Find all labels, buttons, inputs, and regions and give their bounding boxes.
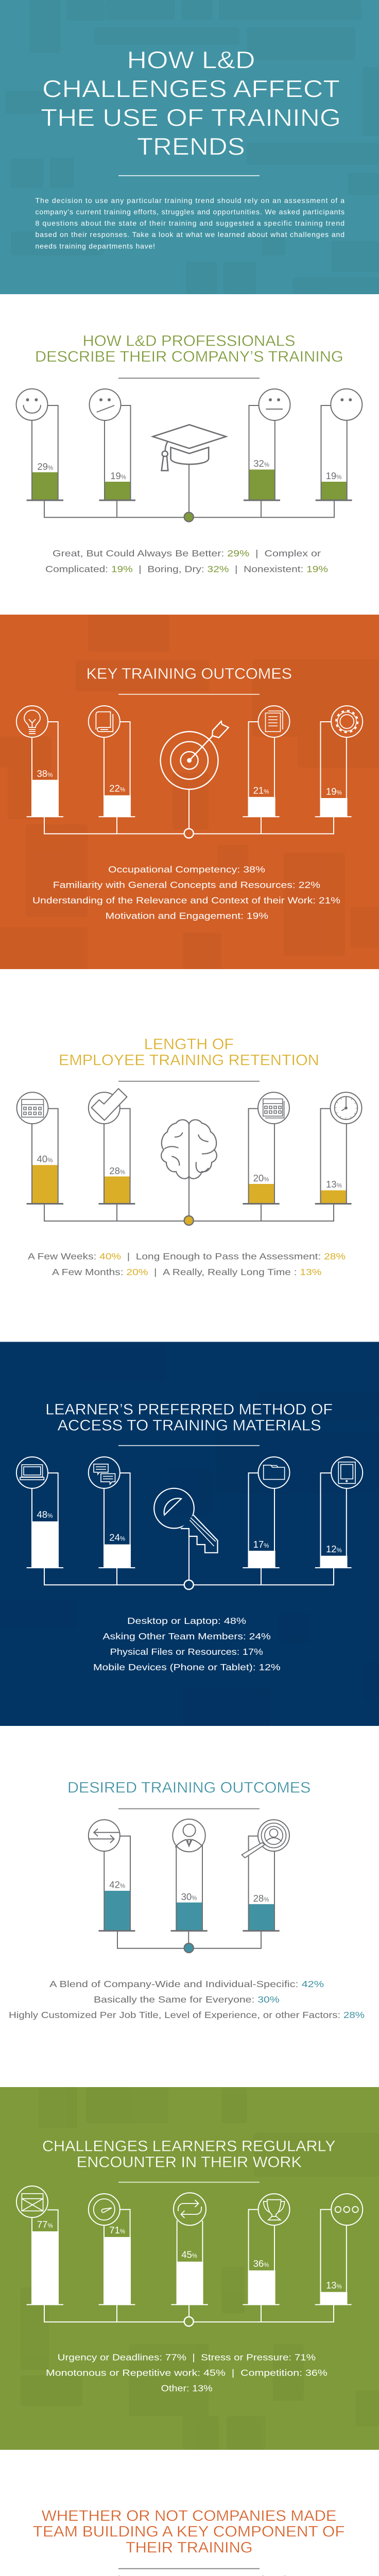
bar: desktop or laptop 48%: 48% (37, 1509, 53, 1520)
heading: HOW L&D PROFESSIONALS (82, 332, 296, 349)
icon: document (266, 711, 283, 732)
panel: desired training outcomes (0, 1726, 379, 2087)
bar: physical files 17% (243, 1457, 289, 1568)
heading: ACCESS TO TRAINING MATERIALS (58, 1417, 321, 1434)
bar: nonexistent 19% (316, 389, 362, 500)
bar: occupational competency 38% (16, 706, 63, 817)
results text: Complicated: 19% | Boring, Dry: 32% | Nonexistent: 19% (45, 564, 328, 574)
icon: gauge (94, 2199, 115, 2220)
bar: boring 32%: 32% (253, 458, 269, 469)
results text: Motivation and Engagement: 19% (106, 911, 268, 921)
intro paragraph: 8 questions about the state of their training and suggested a specific training trend (35, 219, 344, 227)
icon: book (96, 712, 113, 732)
bar: same for everyone 30% (171, 1819, 208, 1931)
bar: monotonous 45%: 45% (181, 2249, 197, 2260)
heading: THEIR TRAINING (126, 2539, 253, 2556)
results text (93, 1616, 281, 1672)
icon: calendar stack (263, 1099, 284, 1118)
icon: calendar (22, 1099, 43, 1117)
icon: check mark (92, 1089, 127, 1120)
bar: occupational competency 38%: 38% (37, 768, 53, 779)
results text (46, 2352, 328, 2394)
results text: Other: 13% (161, 2383, 213, 2394)
results text: Physical Files or Resources: 17% (110, 1647, 263, 1657)
panel: key training outcomes (0, 615, 379, 969)
icon: magnifier with person (242, 1823, 286, 1858)
bar: pass the assessment 28%: 28% (109, 1165, 125, 1176)
bar: asking team members 24%: 24% (109, 1532, 125, 1543)
bar: a few weeks 40% (16, 1092, 63, 1204)
results text: Monotonous or Repetitive work: 45% | Competition: 36% (46, 2368, 328, 2378)
bar: complex 19% (90, 389, 135, 500)
icon: tablet (338, 1462, 355, 1483)
icon: folder (264, 1465, 285, 1480)
heading: WHETHER OR NOT COMPANIES MADE (42, 2507, 337, 2524)
bar: familiarity 22%: 22% (109, 783, 125, 794)
icon: two-way arrows (88, 1829, 119, 1843)
bar: other 13%: 13% (326, 2280, 342, 2291)
bar: great 29%: 29% (37, 461, 53, 472)
icon: repeat arrows (178, 2200, 201, 2218)
bar: complex 19%: 19% (110, 470, 126, 481)
results text: A Few Months: 20% | A Really, Really Long Time : 13% (52, 1267, 321, 1277)
connector with center dot (44, 1536, 334, 1589)
icon: brain (161, 1120, 217, 1180)
icon: chat bubbles (94, 1464, 115, 1484)
bar: relevance 21% (243, 706, 289, 817)
title: TRENDS (137, 133, 245, 160)
bar: a few months 20%: 20% (253, 1173, 269, 1183)
results text: Asking Other Team Members: 24% (103, 1631, 271, 1641)
results text: Occupational Competency: 38% (108, 865, 265, 875)
icon: three dots (335, 2207, 358, 2212)
bar: nonexistent 19%: 19% (326, 470, 341, 481)
heading (33, 2507, 345, 2556)
bar: great 29% (16, 389, 63, 500)
results text (32, 865, 340, 921)
bar: a blend 42% (88, 1820, 135, 1931)
bar: really long time 13%: 13% (326, 1179, 342, 1190)
results text (28, 1251, 346, 1277)
heading (35, 332, 343, 365)
bar: boring 32% (244, 389, 290, 500)
bar: really long time 13% (315, 1092, 361, 1204)
icon: gear (336, 711, 358, 733)
icon: laptop (20, 1465, 44, 1480)
panel: team building (0, 2450, 379, 2576)
results text: A Blend of Company-Wide and Individual-Specific: 42% (49, 1979, 324, 1989)
icon: graduation cap (153, 425, 226, 470)
results text: Great, But Could Always Be Better: 29% | Complex or (53, 548, 321, 558)
bar: stress 71%: 71% (109, 2225, 125, 2235)
connector with center dot (44, 2304, 334, 2326)
title: THE USE OF TRAINING (41, 104, 341, 131)
intro paragraph: based on their responses. Take a look at what we learned about what challenges and (35, 230, 344, 239)
results text: Desktop or Laptop: 48% (127, 1616, 246, 1626)
connector with center dot (44, 1123, 334, 1225)
bar: other 13% (315, 2194, 363, 2304)
icon: person with tie (175, 1824, 202, 1848)
heading: EMPLOYEE TRAINING RETENTION (59, 1052, 319, 1069)
results text: A Few Weeks: 40% | Long Enough to Pass the Assessment: 28% (28, 1251, 346, 1261)
bar: stress 71% (89, 2194, 135, 2304)
panel: how L&D professionals describe training (0, 294, 379, 615)
bar: a few weeks 40%: 40% (37, 1154, 53, 1164)
title: HOW L&D (127, 46, 255, 73)
bar: competition 36%: 36% (253, 2258, 269, 2269)
results text: Urgency or Deadlines: 77% | Stress or Pressure: 71% (58, 2352, 316, 2363)
bar: competition 36% (243, 2194, 289, 2304)
heading: LENGTH OF (144, 1036, 234, 1053)
heading (45, 1401, 333, 1434)
bar: same for everyone 30%: 30% (181, 1891, 197, 1902)
icon: trophy (264, 2200, 285, 2220)
bar: urgency 77%: 77% (37, 2219, 53, 2230)
icon: light bulb (24, 710, 40, 734)
heading: ENCOUNTER IN THEIR WORK (77, 2154, 302, 2171)
panel: learner's preferred method of access (0, 1342, 379, 1726)
heading: LEARNER’S PREFERRED METHOD OF (45, 1401, 333, 1418)
bar: a blend 42%: 42% (109, 1879, 125, 1890)
bar: motivation 19%: 19% (326, 786, 342, 796)
results text: Familiarity with General Concepts and Resources: 22% (53, 880, 320, 890)
heading: TEAM BUILDING A KEY COMPONENT OF (33, 2523, 345, 2540)
connector with center dot (117, 1931, 261, 1953)
bar: asking team members 24% (89, 1457, 135, 1568)
heading: DESCRIBE THEIR COMPANY’S TRAINING (35, 348, 343, 365)
title (41, 46, 341, 160)
bar: highly customized 28% (242, 1820, 289, 1931)
bar: physical files 17%: 17% (253, 1539, 269, 1550)
results text: Highly Customized Per Job Title, Level of Experience, or other Factors: 28% (9, 2010, 365, 2020)
icon: clock (335, 1096, 357, 1120)
bar: a few months 20% (243, 1092, 289, 1204)
title: CHALLENGES AFFECT (42, 75, 340, 103)
heading: CHALLENGES LEARNERS REGULARLY (42, 2138, 336, 2155)
heading (42, 2138, 336, 2171)
intro paragraph: The decision to use any particular training trend should rely on an assessment of a (35, 196, 344, 205)
intro paragraph: needs training departments have! (35, 242, 155, 250)
icon: window with cross (22, 2194, 43, 2211)
bar: relevance 21%: 21% (253, 785, 269, 795)
panel: length of employee training retention (0, 969, 379, 1342)
panel: hero (0, 0, 379, 294)
results text: Mobile Devices (Phone or Tablet): 12% (93, 1662, 281, 1672)
icon: key (154, 1488, 217, 1553)
intro paragraph (35, 196, 344, 250)
results text: Basically the Same for Everyone: 30% (94, 1994, 280, 2005)
bar: mobile devices 12%: 12% (326, 1544, 342, 1554)
results text: Understanding of the Relevance and Context of their Work: 21% (32, 895, 340, 906)
heading (59, 1036, 319, 1069)
bar: pass the assessment 28% (89, 1089, 135, 1204)
bar: mobile devices 12% (315, 1457, 363, 1568)
icon: target with arrow (161, 721, 229, 789)
bar: monotonous 45% (171, 2193, 208, 2304)
bar: desktop or laptop 48% (16, 1457, 63, 1568)
connector with center dot (44, 789, 334, 838)
intro paragraph: company’s current training efforts, struggles and opportunities. We asked participants (35, 208, 344, 216)
bar: motivation 19% (315, 706, 363, 817)
heading: KEY TRAINING OUTCOMES (87, 666, 292, 682)
results text (45, 548, 328, 574)
bar: highly customized 28%: 28% (253, 1893, 269, 1904)
connector with center dot (44, 464, 334, 521)
results text (9, 1979, 365, 2020)
heading: DESIRED TRAINING OUTCOMES (67, 1780, 311, 1797)
bar: urgency 77% (16, 2186, 63, 2304)
panel: challenges learners encounter (0, 2087, 379, 2450)
bar: familiarity 22% (89, 706, 135, 817)
